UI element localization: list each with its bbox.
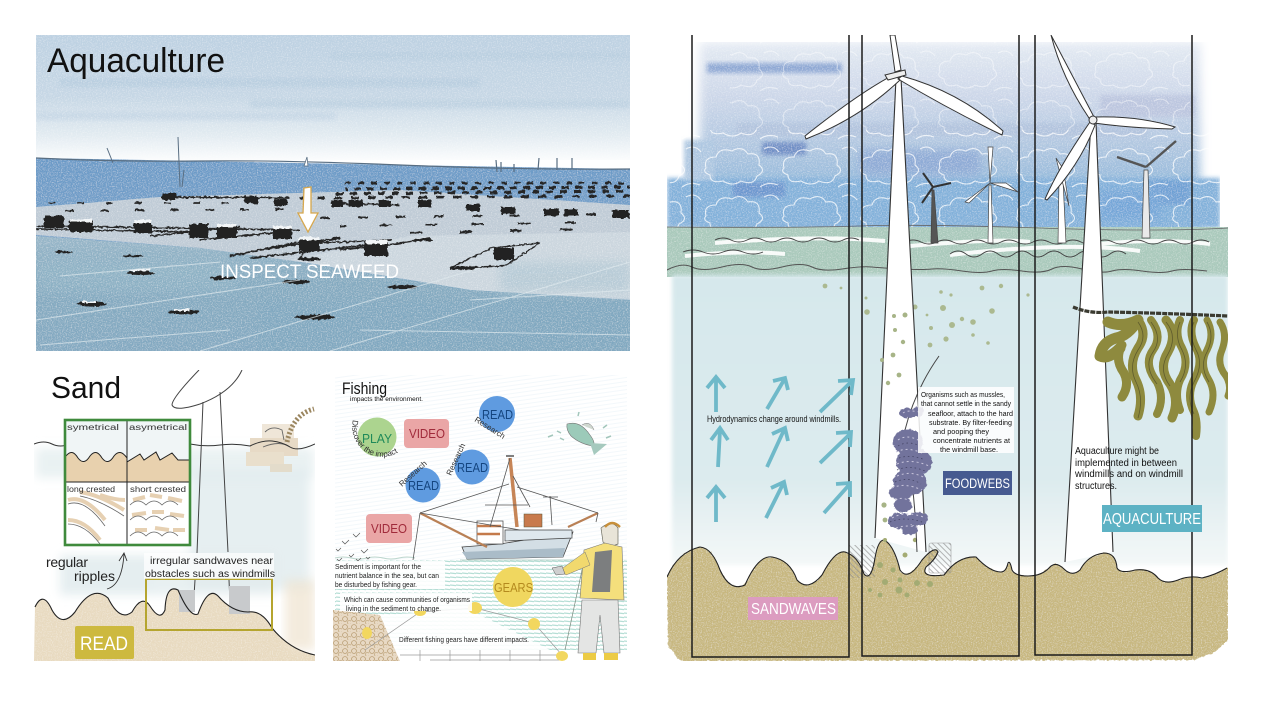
text: aquaculture note: implemented in between [1075, 458, 1177, 469]
button: video lower [366, 514, 412, 543]
fishing boat [413, 456, 598, 560]
text: organisms: concentrate nutrients at [933, 436, 1011, 445]
sky [36, 35, 630, 160]
icon: down arrow [298, 187, 318, 232]
icon: jumping fish [548, 412, 611, 455]
sky hatching [335, 375, 627, 560]
windmill: far A [922, 173, 951, 243]
panel: windmill cross-section [667, 35, 1230, 661]
cloud outlines [670, 40, 1225, 227]
waterline [335, 557, 575, 560]
ripple types box: asymetrical [129, 423, 187, 432]
button: play [358, 418, 396, 456]
text: sediment: nutrient balance in the sea, but can [335, 571, 439, 580]
sand seabed [667, 540, 1228, 661]
flow arrows [707, 377, 853, 522]
birds [336, 533, 370, 561]
text: organisms: seafloor, attach to the hard [928, 409, 1013, 418]
ripple types box: symetrical [67, 423, 119, 432]
text: organisms: that cannot settle in the sandy [921, 399, 1011, 408]
water wash [36, 448, 314, 595]
text: gears: Different fishing gears have different impacts. [399, 635, 529, 644]
text: communities: Which can cause communities of organisms [344, 595, 470, 604]
big windmill 2 [1045, 35, 1175, 562]
button: gears [493, 567, 533, 607]
sandwave outline [35, 589, 315, 655]
button: read [75, 626, 134, 659]
open sea [36, 158, 630, 351]
text: aquaculture note [1074, 446, 1183, 492]
windmill outline [172, 370, 242, 612]
rope on windmill [1073, 307, 1228, 316]
panel: sand [34, 370, 315, 661]
label: research left: Research [397, 459, 429, 488]
title: Aquaculture: Aquaculture [47, 42, 225, 80]
sediment and net [333, 608, 562, 661]
label: regular ripples [46, 553, 127, 589]
ripple types box: short crested [130, 485, 186, 494]
button: foodwebs [943, 471, 1012, 495]
distant windmills [922, 141, 1176, 243]
title: Fishing: Fishing [342, 379, 387, 398]
text: hydrodynamics: Hydrodynamics change around windmills. [707, 414, 841, 424]
ripple types box: long crested [67, 485, 115, 494]
ripple types box [65, 420, 190, 545]
button: foodwebs: FOODWEBS [945, 476, 1010, 491]
text: sediment: be disturbed by fishing gear. [335, 580, 417, 589]
label: regular ripples: regular [46, 554, 88, 570]
text: sediment: Sediment is important for the [335, 562, 421, 571]
text: aquaculture note: windmills and on windmill [1074, 469, 1183, 480]
text: organisms: and pooping they [933, 427, 989, 436]
button: read middle: READ [457, 460, 488, 475]
sea hatching [335, 560, 627, 650]
subtitle: impacts the environment: impacts the environment. [350, 396, 423, 403]
deep water [672, 275, 1228, 565]
button: video lower: VIDEO [371, 521, 407, 536]
grey obstacles [179, 586, 250, 614]
button: read top: READ [482, 407, 513, 422]
fisherman [552, 523, 624, 660]
frames [692, 35, 1192, 657]
label: inspect seaweed: INSPECT SEAWEED [220, 262, 399, 283]
button: gears: GEARS [494, 581, 533, 595]
irregular sandwaves box [146, 579, 272, 630]
sand outline [667, 540, 1227, 587]
windmill: far B [965, 147, 1018, 243]
shore rocks [246, 409, 314, 472]
yellow floats [362, 602, 568, 661]
text: organisms: the windmill base. [940, 445, 998, 454]
windmill base blocks [849, 543, 951, 578]
water surface line [34, 441, 315, 449]
horizon line and poles [36, 137, 630, 187]
seaweed farm floats [36, 183, 630, 320]
mussel cluster [888, 356, 939, 552]
text: organisms [918, 387, 1014, 454]
text: organisms: Organisms such as mussles, [921, 390, 1005, 399]
note: irregular sandwaves: obstacles such as windmills [145, 569, 275, 580]
button: aquaculture [1102, 505, 1202, 532]
button: read: READ [80, 634, 128, 655]
button: aquaculture: AQUACULTURE [1103, 511, 1201, 528]
button: read middle [454, 450, 490, 484]
seaweed [1100, 320, 1230, 436]
text: communities: living in the sediment to change. [346, 604, 441, 613]
label: research middle: Research [445, 442, 467, 477]
text: aquaculture note: Aquaculture might be [1075, 446, 1159, 457]
buried particles [868, 538, 933, 598]
button: play: PLAY [362, 431, 392, 446]
button: read left: READ [408, 478, 439, 493]
text: sediment [333, 561, 445, 589]
button: sandwaves: SANDWAVES [751, 601, 836, 618]
panel: aquaculture scene [36, 35, 630, 351]
plankton dots [823, 284, 1030, 347]
title: Sand: Sand [51, 370, 121, 405]
windmill: far D [1117, 141, 1176, 238]
button: sandwaves [748, 597, 838, 620]
note: irregular sandwaves [144, 553, 275, 580]
wave crests [667, 225, 1228, 272]
label: regular ripples: ripples [74, 568, 115, 584]
button: read top [479, 396, 515, 432]
seabed sand [34, 589, 315, 661]
scratched water highlights [36, 262, 630, 351]
text: aquaculture note: structures. [1075, 481, 1117, 492]
panel: fishing [333, 375, 627, 661]
label: discover the impact: Discover the impact [352, 420, 398, 458]
text: organisms: substrate. By filter-feeding [929, 418, 1012, 427]
windmill: far C [1052, 158, 1069, 243]
label: research top: Research [473, 415, 507, 441]
button: video top: VIDEO [409, 426, 445, 441]
big windmill 1 [805, 35, 1003, 552]
note: irregular sandwaves: irregular sandwaves near [150, 556, 274, 567]
sea surface band [667, 227, 1228, 277]
sky [667, 42, 1220, 232]
text: communities [340, 593, 472, 613]
button: read left [406, 468, 440, 502]
button: video top [404, 419, 449, 448]
